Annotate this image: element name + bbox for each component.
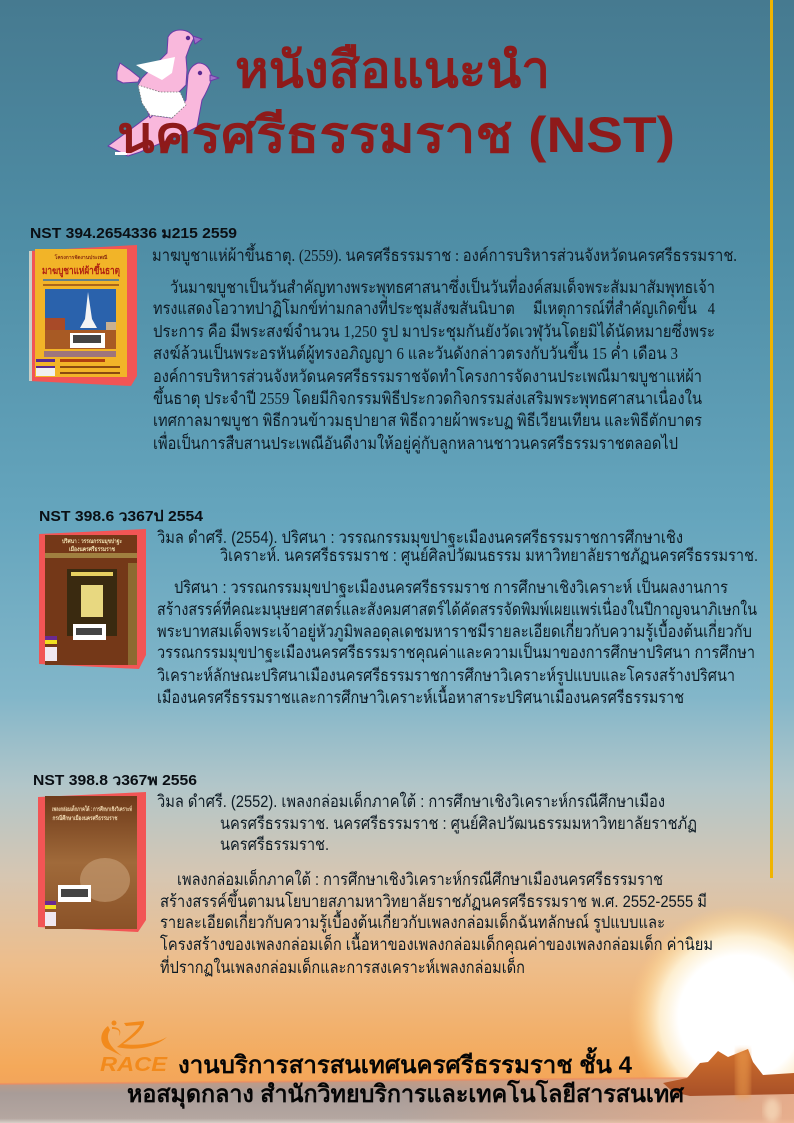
- citation 3: [157, 790, 697, 854]
- citation 2: วิมล ดำศรี. (2554). ปริศนา : วรรณกรรมมุขปาฐะเมืองนครศรีธรรมราชการศึกษาเชิง: [157, 528, 683, 548]
- book cover 1: [29, 245, 137, 386]
- summary 3: โครงสร้างของเพลงกล่อมเด็ก เนื้อหาของเพลงกล่อมเด็กคุณค่าของเพลงกล่อมเด็ก ค่านิยม: [160, 932, 713, 955]
- summary 3: [160, 868, 713, 977]
- summary 1: เพื่อเป็นการสืบสานประเพณีอันดีงามให้อยู่คู่กับลูกหลานชาวนครศรีธรรมราชตลอดไป: [153, 431, 678, 454]
- rock island silhouette: [663, 1049, 794, 1098]
- footer text: งานบริการสารสนเทศนครศรีธรรมราช ชั้น 4: [178, 1046, 633, 1079]
- upper dove beak: [193, 36, 202, 44]
- summary 1: [153, 275, 715, 454]
- upper dove tail: [117, 63, 140, 83]
- book cover 2: ปริศนา : วรรณกรรมมุขปาฐะ: [62, 537, 122, 545]
- summary 1: ขึ้นธาตุ ประจำปี 2559 โดยมีกิจกรรมพิธีประกวดกิจกรรมส่งเสริมพระพุทธศาสนาเนื่องใน: [153, 386, 702, 409]
- panel: book 1: [29, 225, 737, 454]
- citation 3: นครศรีธรรมราช. นครศรีธรรมราช : ศูนย์ศิลปวัฒนธรรมมหาวิทยาลัยราชภัฏ: [220, 814, 697, 834]
- call number 1: NST 394.2654336 ม215 2559: [30, 225, 237, 242]
- book cover 2: [39, 529, 146, 669]
- icon: RACE logo: [100, 1020, 168, 1076]
- summary 1: ทรงแสดงโอวาทปาฏิโมกข์ท่ามกลางที่ประชุมสังฆสันนิบาต มีเหตุการณ์ที่สำคัญเกิดขึ้น 4: [153, 296, 715, 319]
- lower wing: [138, 85, 186, 118]
- title: นครศรีธรรมราช (NST): [117, 107, 675, 163]
- lower dove: [108, 63, 212, 156]
- summary 1: ประการ คือ มีพระสงฆ์จำนวน 1,250 รูป มาประชุมกันยังวัดเวฬุวันโดยมิได้นัดหมายซึ่งพระ: [153, 319, 715, 342]
- call number 2: NST 398.6 ว367ป 2554: [39, 508, 204, 525]
- summary 1: องค์การบริหารส่วนจังหวัดนครศรีธรรมราชจัดทำโครงการจัดงานประเพณีมาฆบูชาแห่ผ้า: [153, 366, 702, 387]
- summary 2: เมืองนครศรีธรรมราชและการศึกษาวิเคราะห์เนื้อหาสาระปริศนาเมืองนครศรีธรรมราช: [157, 685, 684, 707]
- icon: RACE logo: RACE: [100, 1054, 168, 1076]
- citation 2: [157, 528, 758, 566]
- panel: book 2: [39, 508, 758, 707]
- summary 1: สงฆ์ล้วนเป็นพระอรหันต์ผู้ทรงอภิญญา 6 และวันดังกล่าวตรงกับวันขึ้น 15 ค่ำ เดือน 3: [153, 341, 678, 364]
- icon: pink doves: [108, 30, 219, 156]
- citation 3: นครศรีธรรมราช.: [220, 835, 329, 854]
- panel: book 3: [33, 772, 713, 977]
- book cover 3: [38, 792, 146, 932]
- yellow vertical rule: [770, 0, 773, 878]
- upper dove: [138, 30, 194, 118]
- upper wing: [136, 57, 175, 80]
- sun reflection on sea: [764, 1098, 780, 1122]
- footer text: [127, 1046, 685, 1110]
- summary 3: รายละเอียดเกี่ยวกับความรู้เบื้องต้นเกี่ยวกับเพลงกล่อมเด็กฉันทลักษณ์ รูปแบบและ: [160, 910, 665, 933]
- summary 1: วันมาฆบูชาเป็นวันสำคัญทางพระพุทธศาสนาซึ่งเป็นวันที่องค์สมเด็จพระสัมมาสัมพุทธเจ้า: [170, 275, 715, 298]
- summary 1: เทศกาลมาฆบูชา พิธีกวนข้าวมธุปายาส พิธีถวายผ้าพระบฏ พิธีเวียนเทียน และพิธีตักบาตร: [153, 411, 702, 431]
- lower dove beak: [210, 75, 219, 81]
- summary 2: [157, 576, 757, 707]
- book cover 1: มาฆบูชาแห่ผ้าขึ้นธาตุ: [42, 263, 120, 278]
- summary 3: สร้างสรรค์ขึ้นตามนโยบายสภามหาวิทยาลัยราชภัฏนครศรีธรรมราช พ.ศ. 2552-2555 มี: [160, 889, 707, 911]
- book cover 3: กรณีศึกษาเมืองนครศรีธรรมราช: [52, 814, 118, 822]
- call number 3: NST 398.8 ว367พ 2556: [33, 772, 197, 789]
- book cover 2: เมืองนครศรีธรรมราช: [69, 545, 115, 553]
- summary 3: เพลงกล่อมเด็กภาคใต้ : การศึกษาเชิงวิเคราะห์กรณีศึกษาเมืองนครศรีธรรมราช: [177, 868, 663, 889]
- title: หนังสือแนะนำ: [235, 42, 550, 98]
- summary 3: ที่ปรากฏในเพลงกล่อมเด็กและการสงเคราะห์เพลงกล่อมเด็ก: [160, 955, 525, 977]
- book cover 1: โครงการจัดงานประเพณี: [54, 254, 108, 261]
- footer text: หอสมุดกลาง สำนักวิทยบริการและเทคโนโลยีสารสนเทศ: [127, 1079, 685, 1110]
- citation 3: วิมล ดำศรี. (2552). เพลงกล่อมเด็กภาคใต้ : การศึกษาเชิงวิเคราะห์กรณีศึกษาเมือง: [157, 790, 665, 811]
- title: [117, 42, 675, 163]
- book cover 3: เพลงกล่อมเด็กภาคใต้ : การศึกษาเชิงวิเคราะห์: [52, 804, 132, 813]
